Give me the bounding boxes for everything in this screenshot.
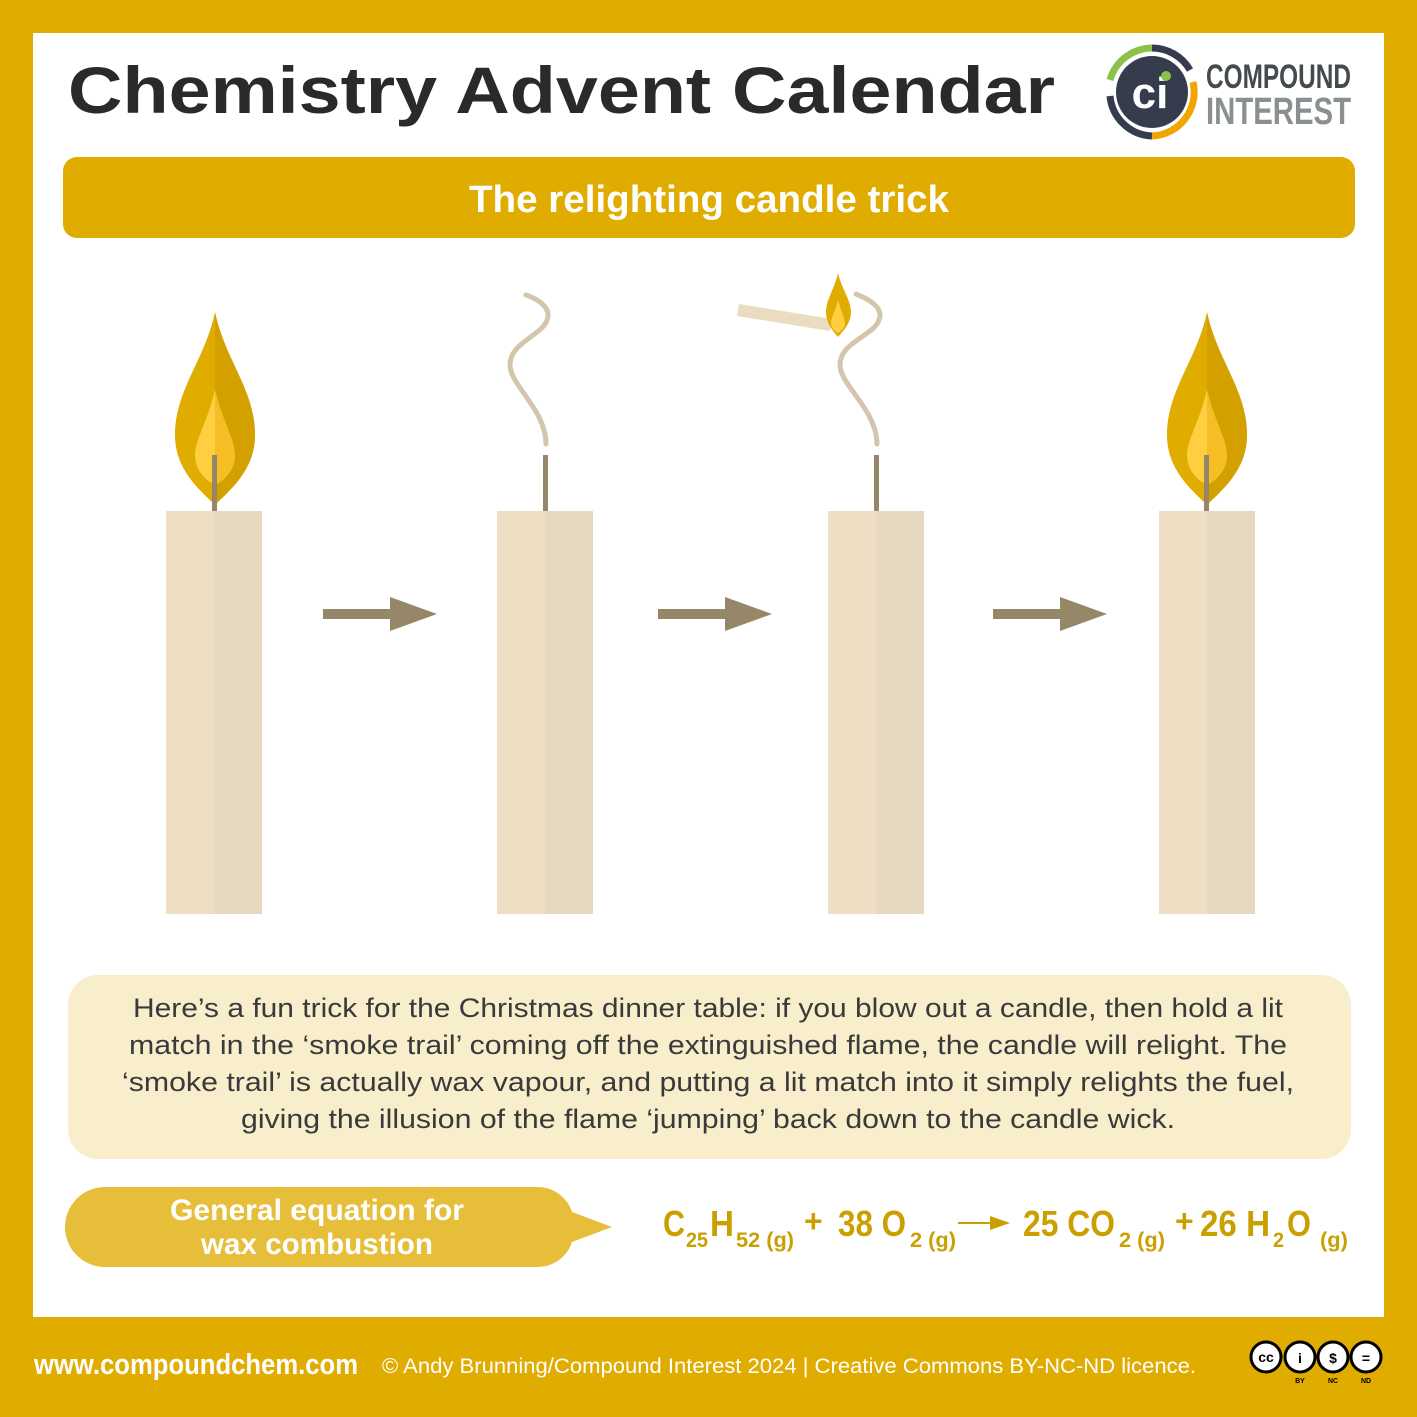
callout: general equation label: General equation for [170, 1194, 464, 1227]
explanation text box: match in the ‘smoke trail’ coming off the extinguished flame, the candle will relight. The [129, 1030, 1287, 1060]
equation: 2 (g) [1119, 1229, 1165, 1252]
explanation text box: giving the illusion of the flame ‘jumping’ back down to the candle wick. [241, 1104, 1175, 1134]
explanation text box [68, 975, 1351, 1159]
equation: 2 (g) [910, 1229, 956, 1252]
title: Chemistry Advent Calendar [68, 53, 1055, 127]
candle 4: relit [1159, 312, 1255, 914]
arrow 3 [993, 597, 1107, 631]
candle 3: match in smoke [737, 273, 924, 914]
equation: 52 (g) [736, 1229, 794, 1252]
licence icons: BY [1295, 1378, 1305, 1385]
logo: compound interest: ci [1132, 69, 1168, 118]
licence icons: i [1298, 1350, 1302, 1366]
equation: C [663, 1203, 685, 1244]
footer: copyright: © Andy Brunning/Compound Interest 2024 | Creative Commons BY-NC-ND licence. [382, 1355, 1196, 1378]
logo: compound interest: COMPOUND [1206, 58, 1351, 96]
candle 2: extinguished with smoke [497, 295, 593, 914]
equation: 25 CO [1023, 1203, 1115, 1244]
callout: general equation label [65, 1187, 612, 1267]
explanation text box: Here’s a fun trick for the Christmas dinner table: if you blow out a candle, then hold a lit [133, 993, 1284, 1023]
equation: 2 [1273, 1229, 1284, 1252]
licence icons: = [1362, 1350, 1370, 1366]
explanation text box: ‘smoke trail’ is actually wax vapour, and putting a lit match into it simply relights the fuel, [122, 1067, 1294, 1097]
equation: + [1175, 1203, 1194, 1239]
arrow 1 [323, 597, 437, 631]
equation: (g) [1320, 1229, 1348, 1252]
licence icons: ND [1361, 1378, 1371, 1385]
equation: + [804, 1203, 823, 1239]
equation: O [1287, 1203, 1311, 1244]
licence icons [1251, 1342, 1381, 1385]
equation: H [710, 1203, 734, 1244]
logo: compound interest [1110, 48, 1351, 136]
subtitle banner [63, 157, 1355, 238]
logo: compound interest: INTEREST [1206, 91, 1351, 133]
equation [663, 1203, 1348, 1252]
licence icons: NC [1328, 1378, 1338, 1385]
licence icons: cc [1258, 1349, 1274, 1365]
arrow 2 [658, 597, 772, 631]
subtitle banner: The relighting candle trick [469, 179, 950, 221]
equation: 38 O [838, 1203, 906, 1244]
equation: 25 [686, 1229, 708, 1252]
footer: website: www.compoundchem.com [33, 1349, 358, 1381]
equation: 26 H [1200, 1203, 1270, 1244]
candle 1: lit [166, 312, 262, 914]
callout: general equation label: wax combustion [200, 1228, 433, 1261]
licence icons: $ [1329, 1350, 1337, 1366]
